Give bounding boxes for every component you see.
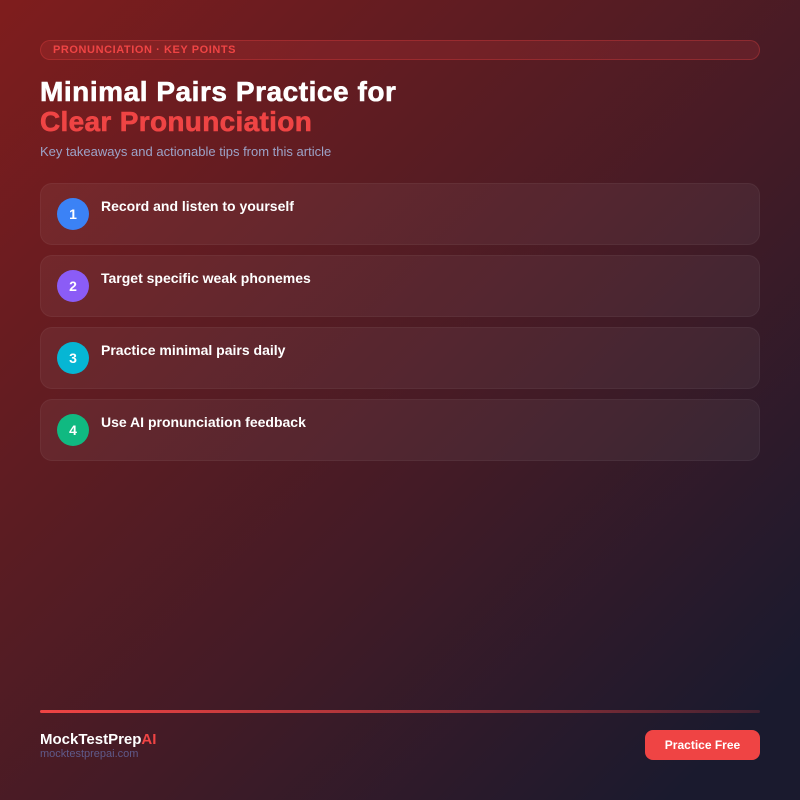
call to action button: Practice Free: [665, 738, 740, 752]
number badge 1: [57, 198, 89, 230]
number badge 4: 4: [69, 422, 77, 438]
number badge 3: [57, 342, 89, 374]
tip 2 text: Target specific weak phonemes: [101, 270, 311, 286]
tip 1 text: Record and listen to yourself: [101, 198, 294, 214]
title: Clear Pronunciation: [40, 106, 312, 137]
panel: tip 3: [40, 327, 760, 389]
website url: mocktestprepai.com: [40, 748, 138, 760]
panel: tip 4: [40, 399, 760, 461]
panel: tip 2: [40, 255, 760, 317]
number badge 2: [57, 270, 89, 302]
category badge: PRONUNCIATION · KEY POINTS: [53, 44, 236, 56]
brand name: MockTestPrepAI: [40, 731, 156, 748]
tip 4 text: Use AI pronunciation feedback: [101, 414, 306, 430]
number badge 4: [57, 414, 89, 446]
number badge 2: 2: [69, 278, 77, 294]
subtitle: Key takeaways and actionable tips from this article: [40, 144, 331, 159]
tip 3 text: Practice minimal pairs daily: [101, 342, 285, 358]
title: Minimal Pairs Practice for: [40, 76, 396, 107]
call to action button: [645, 730, 760, 760]
panel: tip 1: [40, 183, 760, 245]
number badge 1: 1: [69, 206, 77, 222]
title: [40, 76, 396, 137]
number badge 3: 3: [69, 350, 77, 366]
category badge: [40, 40, 760, 60]
